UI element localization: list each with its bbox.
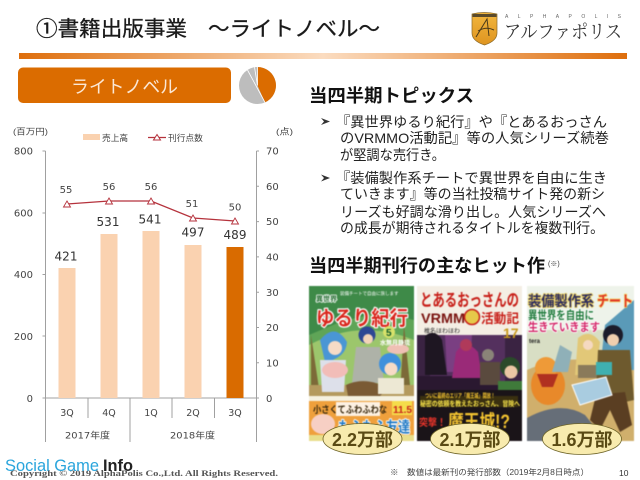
book cover 1: もふもふ友達: [338, 418, 410, 436]
badge: 1.6万部: 1.6万部: [552, 430, 612, 450]
right axis unit: (点): [276, 126, 293, 136]
left axis labels: 200: [14, 332, 33, 343]
right axis labels: 50: [266, 217, 279, 228]
title: ①書籍出版事業: [36, 18, 187, 41]
logo wordmark: アルファポリス: [504, 22, 622, 43]
book cover 3: [527, 286, 634, 441]
book cover 1: [309, 286, 414, 441]
quarter labels: [60, 408, 242, 419]
bar value labels: 531: [97, 215, 119, 229]
book cover 3: tera: [529, 339, 541, 345]
fiscal year labels: [65, 430, 215, 442]
bullet 1: が堅調な売行き。: [340, 147, 445, 163]
cover title: 装備製作系: [528, 293, 594, 309]
left axis unit: (百万円): [13, 126, 48, 136]
book cover 1: 小さくてふわふわな: [313, 404, 387, 416]
logo: Alphapolis: [472, 12, 622, 45]
right axis labels: 40: [266, 252, 279, 264]
hero figure: [603, 325, 623, 345]
badge: 2.1万部: 2.1万部: [440, 430, 500, 450]
badge: 2.2万部: [323, 424, 402, 454]
book cover 3: 異世界を自由に: [528, 308, 594, 322]
book cover 1: 11.5: [393, 405, 412, 416]
bullet 2: の成長が期待されるタイトルを複数刊行。: [340, 220, 604, 236]
right axis labels: 20: [266, 323, 279, 334]
badge: 2.2万部: 2.2万部: [332, 430, 393, 450]
right axis labels: 70: [266, 146, 279, 158]
line value labels: 55: [60, 185, 72, 196]
right axis labels: 0: [266, 394, 272, 405]
heading: quarterly topics: 当四半期トピックス: [309, 86, 474, 106]
heading: main hit titles: (※): [548, 260, 560, 268]
heading: main hit titles: 当四半期刊行の主なヒット作: [309, 256, 545, 276]
bar and line chart: sales and titles published: [13, 126, 293, 442]
footnote: ※ 数値は最新刊の発行部数（2019年2月8日時点）: [390, 467, 589, 477]
quarter labels: 1Q: [144, 408, 158, 419]
book cover 3: 生きていきます: [528, 320, 600, 334]
book cover 1: 異世界: [316, 294, 337, 303]
right figure: [379, 353, 401, 375]
fiscal year labels: 2017年度: [65, 430, 110, 442]
title: ～ライトノベル～: [208, 18, 380, 41]
text block: topics: [321, 114, 609, 236]
book cover 1: 5: [386, 328, 392, 339]
bullet 2: 『装備製作系チートで異世界を自由に生き: [336, 170, 607, 186]
axes: [42, 151, 259, 442]
bullet 2: [321, 170, 607, 236]
left axis labels: 0: [27, 394, 33, 405]
line value labels: 56: [103, 182, 115, 193]
central figure: [358, 326, 376, 344]
panel: light novel banner: ライトノベル: [71, 77, 178, 97]
rock: [527, 408, 606, 441]
line value labels: 51: [186, 199, 198, 210]
fox: [531, 365, 565, 405]
line value labels: [60, 182, 241, 214]
book cover 2: 椎名ほわほわ: [424, 327, 460, 335]
small figure: [552, 345, 572, 372]
bar value labels: 421: [55, 250, 77, 264]
line series: [64, 198, 238, 224]
watermark: Social Game: [5, 456, 99, 475]
copyright: Copyright © 2019 AlphaPolis Co.,Ltd. All Rights Reserved.: [10, 468, 278, 478]
book cover 2: 秘密の依頼を教えたおっさん、冒険へ: [420, 399, 520, 408]
right axis labels: 10: [266, 358, 279, 370]
title: [36, 18, 380, 41]
header gradient bar: [19, 53, 627, 59]
cover title: ゆるり紀行: [316, 307, 408, 330]
line value labels: 56: [145, 182, 157, 193]
quarter labels: 2Q: [186, 408, 200, 419]
book cover 2: 活動記: [481, 311, 519, 326]
fiscal year labels: 2018年度: [170, 430, 215, 442]
quarter labels: 3Q: [228, 408, 242, 419]
book cover 2: [417, 286, 522, 441]
legend: 刊行点数: [168, 132, 203, 143]
cover obi band: [417, 390, 522, 441]
badge: 1.6万部: [542, 424, 622, 454]
right axis labels: [266, 146, 279, 405]
obi cloud shapes: [336, 402, 380, 416]
legend: 売上高: [102, 132, 128, 143]
book cover 2: ついに最終のエリア「魔王城」開放！: [425, 392, 495, 400]
sales callout badges: [323, 424, 622, 454]
panel: light novel banner: [18, 68, 231, 103]
logo wordmark: ALPHAPOLIS: [505, 14, 622, 20]
legend: [83, 132, 203, 143]
bullet 1: のVRMMO活動記』等の人気シリーズ続巻: [340, 130, 609, 146]
book cover 2: 突撃！: [419, 416, 446, 429]
left figure: [320, 331, 347, 362]
bar value labels: 489: [224, 228, 246, 242]
book cover 1: 水無月静琉: [380, 339, 410, 347]
book cover 2: 17: [503, 325, 519, 341]
blonde figure: [575, 334, 600, 375]
left axis labels: 400: [14, 270, 33, 281]
icon: shield: [472, 12, 497, 45]
watermark: Info: [103, 456, 133, 475]
book cover 2: 魔王城!?: [448, 411, 510, 433]
bullet 1: 『異世界ゆるり紀行』や『とあるおっさん: [336, 114, 607, 130]
bar value labels: 497: [182, 226, 204, 240]
bullet 1: [321, 114, 609, 163]
bars: [58, 231, 244, 398]
book cover 1: 装備チートで自由に旅します: [340, 290, 399, 297]
right axis labels: 60: [266, 182, 279, 193]
quarter labels: 4Q: [102, 408, 116, 419]
figures: [425, 333, 447, 375]
book cover 2: VRMM: [421, 310, 465, 326]
badge: 2.1万部: [430, 424, 510, 454]
bar value labels: [55, 212, 246, 264]
bullet 2: リーズも好調な滑り出し。人気シリーズへ: [340, 204, 606, 220]
bar value labels: 541: [139, 212, 161, 226]
pie chart: segment share: [239, 67, 276, 104]
cover obi band: [309, 396, 414, 441]
line value labels: 50: [229, 202, 241, 214]
left axis labels: 800: [14, 146, 33, 158]
cover title: とあるおっさんの: [420, 291, 519, 310]
bullet 2: ていきます』等の当社投稿サイト発の新シ: [340, 186, 605, 202]
left axis labels: [14, 146, 33, 405]
logo wordmark: [504, 14, 622, 43]
quarter labels: 3Q: [60, 408, 74, 419]
page number: 10: [619, 468, 629, 478]
right axis labels: 30: [266, 288, 279, 299]
left axis labels: 600: [14, 208, 33, 220]
